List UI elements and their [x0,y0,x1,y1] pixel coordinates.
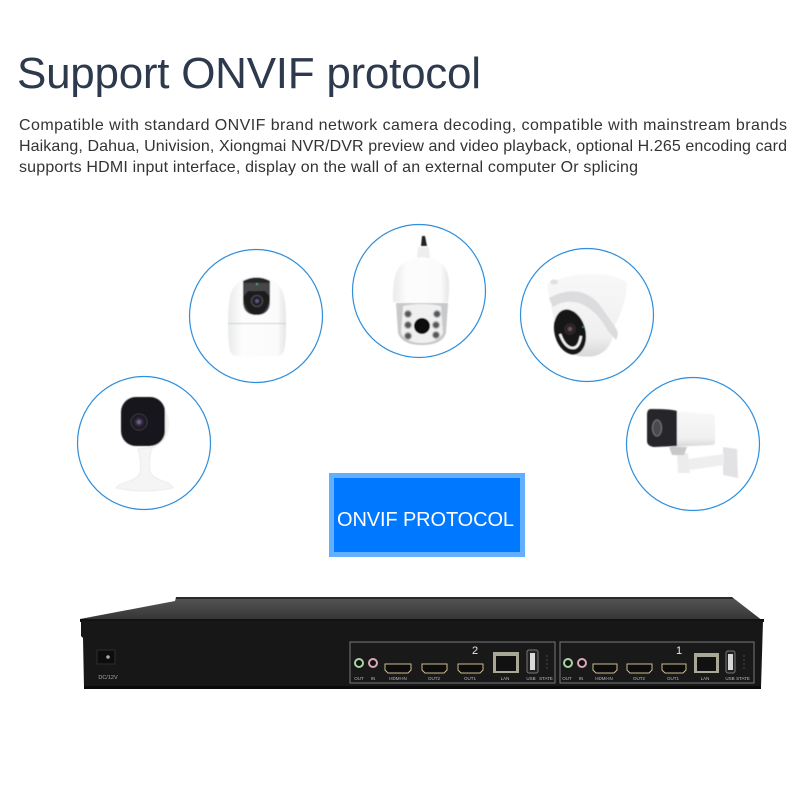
port panel 1: OUT1 [667,676,679,681]
port panel 2: 2 [472,645,478,657]
camera circle: indoor mini camera [78,376,210,510]
port panel 1: STATE [736,676,750,681]
camera circle: turret dome camera [520,248,654,382]
port panel 2: OUT2 [428,676,440,681]
description text [19,117,787,176]
camera circle: pan-tilt indoor camera [190,250,322,382]
port panel 2: OUT [354,676,364,681]
port panel 1: OUT [562,676,572,681]
port panel 2: USB [526,676,536,681]
description text: supports HDMI input interface, display on the wall of an external computer Or splicing [19,159,638,176]
description text: Compatible with standard ONVIF brand network camera decoding, compatible with mainstream brands [19,117,787,134]
title: Support ONVIF protocol [17,49,481,98]
device: video wall decoder [80,597,764,689]
description text: Haikang, Dahua, Univision, Xiongmai NVR/DVR preview and video playback, optional H.265 encoding card [19,138,787,155]
port panel 2: HDMI-IN [389,676,407,681]
port panel 2: OUT1 [464,676,476,681]
port panel 1: OUT2 [633,676,645,681]
power port [97,650,118,681]
ONVIF protocol button: ONVIF PROTOCOL [337,509,514,531]
camera circle: bullet camera on wall bracket [626,378,760,510]
port panel 1: IN [579,676,583,681]
camera circle: PTZ speed dome camera [352,224,486,358]
port panel 1: HDMI-IN [595,676,613,681]
port panel 2: IN [371,676,375,681]
power port: DC/12V [98,675,118,681]
port panel 1: 1 [676,645,682,657]
port panel 2: LAN [501,676,509,681]
port panel 2 [350,642,555,683]
port panel 1 [560,642,754,683]
port panel 2: STATE [539,676,553,681]
port panel 1: USB [725,676,735,681]
ONVIF protocol button [332,476,522,554]
port panel 1: LAN [701,676,709,681]
